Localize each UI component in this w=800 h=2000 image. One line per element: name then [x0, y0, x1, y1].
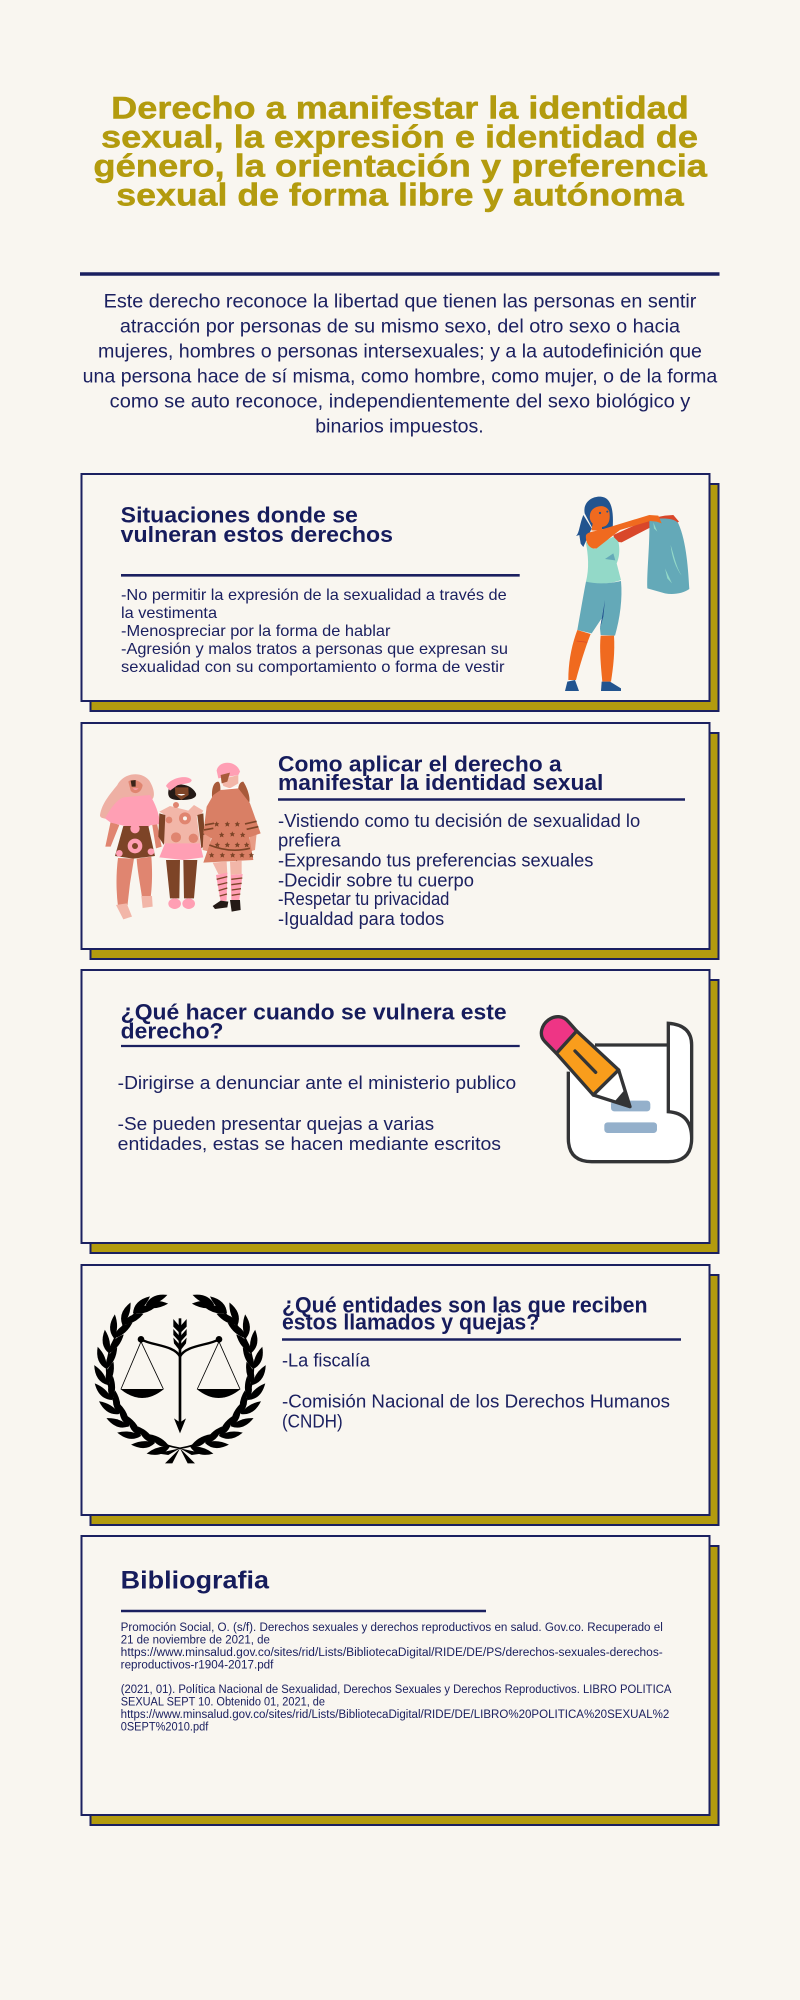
text: como aplicar list: -Vistiendo como tu decisión de sexualidad lo: [278, 811, 640, 831]
text: entidades list: [282, 1351, 670, 1432]
title: [93, 89, 708, 213]
heading: situaciones: vulneran estos derechos: [121, 522, 393, 547]
text: como aplicar list: -Decidir sobre tu cuerpo: [278, 871, 474, 891]
text: situaciones list: [121, 587, 508, 676]
text: situaciones list: sexualidad con su comportamiento o forma de vestir: [121, 659, 505, 676]
text: references: [121, 1622, 672, 1734]
heading: entidades: estos llamados y quejas?: [282, 1309, 539, 1334]
text: references: https://www.minsalud.gov.co/sites/rid/Lists/BibliotecaDigital/RIDE/DE/LIBRO%20POLITICA%20SEXUAL%2: [121, 1709, 669, 1721]
intro paragraph: binarios impuestos.: [315, 415, 484, 437]
text: como aplicar list: -Expresando tus preferencias sexuales: [278, 851, 593, 871]
heading: entidades: [282, 1293, 648, 1334]
heading: como aplicar: manifestar la identidad sexual: [278, 770, 603, 795]
text: references: SEXUAL SEPT 10. Obtenido 01, 2021, de: [121, 1697, 325, 1709]
title: género, la orientación y preferencia: [93, 148, 708, 184]
title: sexual, la expresión e identidad de: [101, 119, 698, 155]
heading: situaciones: [121, 503, 393, 547]
text: references: 21 de noviembre de 2021, de: [121, 1635, 270, 1647]
heading: que hacer: ¿Qué hacer cuando se vulnera este: [121, 999, 507, 1024]
intro paragraph: atracción por personas de su mismo sexo, del otro sexo o hacia: [120, 315, 680, 337]
intro paragraph: [83, 290, 717, 437]
panel: como aplicar: [82, 723, 718, 959]
text: que hacer list: -Se pueden presentar quejas a varias: [118, 1114, 434, 1134]
panel: situaciones: [82, 474, 718, 711]
icon: three friends: [100, 763, 261, 919]
intro paragraph: Este derecho reconoce la libertad que tienen las personas en sentir: [104, 290, 697, 312]
text: que hacer list: -Dirigirse a denunciar ante el ministerio publico: [118, 1073, 516, 1093]
text: references: Promoción Social, O. (s/f). Derechos sexuales y derechos reproductivos en salud. Gov.co. Recuperado el: [121, 1622, 663, 1634]
panel: entidades: [82, 1265, 718, 1525]
text: entidades list: (CNDH): [282, 1412, 343, 1432]
panel: que hacer: [82, 970, 718, 1253]
title: Derecho a manifestar la identidad: [111, 89, 689, 125]
text: como aplicar list: prefiera: [278, 831, 342, 851]
text: references: reproductivos-r1904-2017.pdf: [121, 1660, 274, 1672]
panel: bibliografia: [82, 1536, 718, 1825]
heading: como aplicar: [278, 752, 603, 795]
text: situaciones list: -Menospreciar por la forma de hablar: [121, 623, 391, 640]
intro paragraph: una persona hace de sí misma, como hombre, como mujer, o de la forma: [83, 365, 717, 387]
text: references: 0SEPT%2010.pdf: [121, 1722, 209, 1734]
heading: como aplicar: Como aplicar el derecho a: [278, 752, 562, 777]
intro paragraph: mujeres, hombres o personas intersexuales; y a la autodefinición que: [98, 340, 702, 362]
icon: woman holding garment: [565, 497, 689, 691]
text: que hacer list: [118, 1073, 516, 1154]
text: references: (2021, 01). Política Nacional de Sexualidad, Derechos Sexuales y Derechos Reproductivos. LIBRO POLITICA: [121, 1684, 672, 1696]
text: situaciones list: la vestimenta: [121, 605, 217, 622]
text: como aplicar list: -Igualdad para todos: [278, 909, 444, 929]
text: references: https://www.minsalud.gov.co/sites/rid/Lists/BibliotecaDigital/RIDE/DE/PS/derechos-sexuales-derechos-: [121, 1647, 663, 1659]
text: entidades list: -La fiscalía: [282, 1351, 371, 1371]
text: situaciones list: -No permitir la expresión de la sexualidad a través de: [121, 587, 507, 604]
icon: pencil and document: [541, 1017, 692, 1162]
heading: que hacer: [121, 999, 507, 1043]
icon: scales of justice with laurel: [91, 1291, 269, 1463]
text: como aplicar list: -Respetar tu privacidad: [278, 889, 449, 909]
text: que hacer list: entidades, estas se hacen mediante escritos: [118, 1134, 501, 1154]
heading: entidades: ¿Qué entidades son las que reciben: [282, 1293, 648, 1318]
intro paragraph: como se auto reconoce, independientemente del sexo biológico y: [110, 390, 691, 412]
heading: bibliografia: Bibliografia: [121, 1566, 270, 1594]
text: como aplicar list: [278, 811, 640, 929]
text: situaciones list: -Agresión y malos tratos a personas que expresan su: [121, 641, 508, 658]
heading: que hacer: derecho?: [121, 1018, 224, 1043]
title: sexual de forma libre y autónoma: [116, 177, 684, 213]
heading: situaciones: Situaciones donde se: [121, 503, 358, 528]
text: entidades list: -Comisión Nacional de los Derechos Humanos: [282, 1392, 670, 1412]
